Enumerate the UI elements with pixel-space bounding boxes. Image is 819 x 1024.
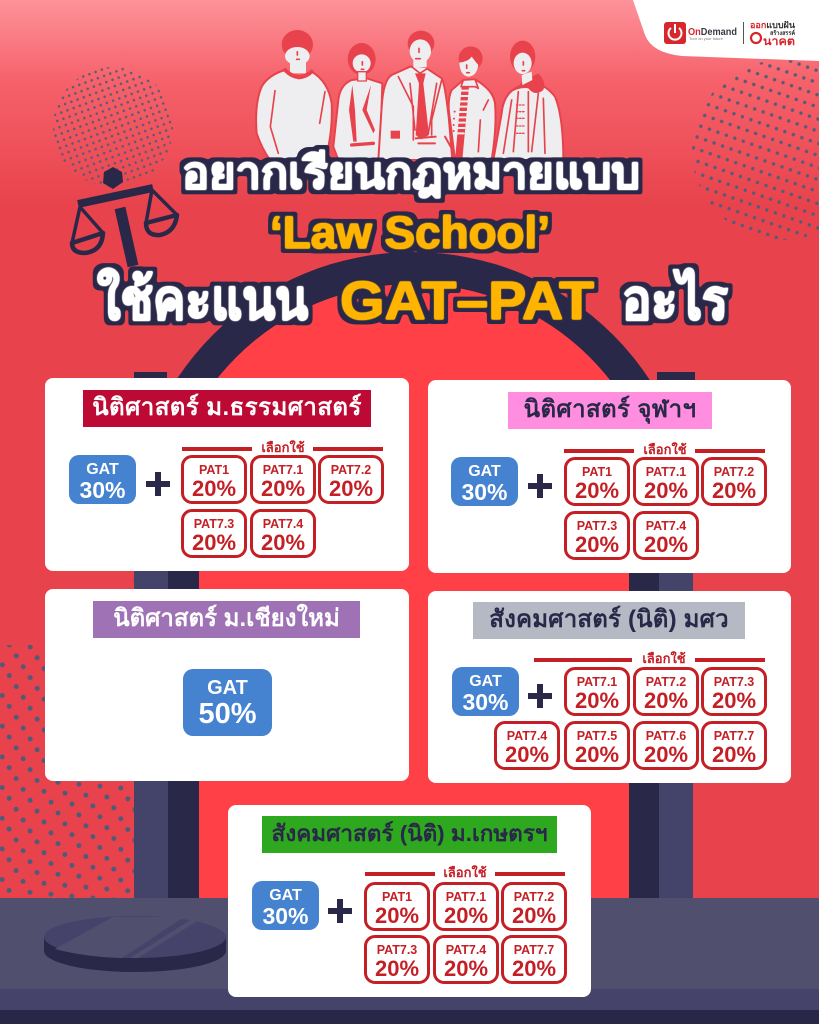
PAT7.1: 20% (444, 903, 488, 928)
GAT score (69, 455, 136, 504)
icon: power button logo (664, 22, 686, 44)
PAT7.3: PAT7.3 (377, 943, 417, 957)
PAT7.3 (564, 511, 630, 560)
heading: นิติศาสตร์ จุฬาฯ (524, 396, 696, 423)
GAT score: 50% (198, 698, 257, 730)
choose header (564, 442, 765, 457)
PAT7.7: PAT7.7 (714, 729, 754, 743)
heading: นิติศาสตร์ ม.ธรรมศาสตร์ (92, 394, 362, 421)
PAT7.1: 20% (575, 688, 619, 713)
choose header (182, 440, 383, 455)
slogan: สร้างสรรค์ (770, 29, 795, 37)
PAT1: 20% (192, 476, 236, 501)
PAT7.4 (494, 721, 560, 770)
PAT7.3: PAT7.3 (714, 675, 754, 689)
GAT score: GAT (468, 463, 501, 480)
title: GAT–PAT (340, 271, 594, 331)
GAT score: 30% (461, 479, 508, 505)
PAT7.5: PAT7.5 (577, 729, 617, 743)
person 2 (333, 43, 382, 160)
PAT7.2 (701, 457, 767, 506)
PAT7.3 (701, 667, 767, 716)
plus sign (146, 472, 170, 496)
PAT7.2: 20% (644, 688, 688, 713)
heading (473, 602, 745, 639)
PAT1 (181, 455, 247, 504)
PAT7.1: 20% (261, 476, 305, 501)
person 4 (449, 46, 496, 160)
PAT7.2: 20% (712, 478, 756, 503)
PAT7.6: 20% (644, 742, 688, 767)
title: ใช้คะแนน (97, 267, 308, 331)
GAT score (452, 667, 519, 716)
choose header (534, 651, 765, 666)
panel: SWU social science law (428, 591, 791, 783)
PAT7.7: PAT7.7 (514, 943, 554, 957)
PAT7.4 (250, 509, 316, 558)
slogan: ออกแบบฝัน (750, 20, 796, 30)
PAT7.2 (501, 882, 567, 931)
slogan (750, 20, 796, 48)
PAT7.2: PAT7.2 (514, 890, 554, 904)
GAT score: GAT (269, 887, 302, 904)
PAT7.1: 20% (644, 478, 688, 503)
GAT score: GAT (469, 673, 502, 690)
panel: Thammasat law (45, 378, 409, 571)
PAT7.7: 20% (712, 742, 756, 767)
corner logo tab (633, 0, 819, 61)
panel: Kasetsart social science law (228, 805, 591, 997)
heading: สังคมศาสตร์ (นิติ) มศว (489, 606, 729, 633)
PAT7.3 (364, 935, 430, 984)
PAT7.1: PAT7.1 (577, 675, 617, 689)
PAT7.4: PAT7.4 (446, 943, 486, 957)
GAT score (451, 457, 518, 506)
PAT7.2: 20% (512, 903, 556, 928)
choose header: เลือกใช้ (643, 442, 687, 457)
choose header: เลือกใช้ (261, 440, 305, 455)
PAT7.1 (564, 667, 630, 716)
PAT7.1: PAT7.1 (263, 463, 303, 477)
PAT1: 20% (575, 478, 619, 503)
choose header (365, 865, 565, 880)
GAT score: GAT (207, 677, 248, 699)
PAT7.3: 20% (375, 956, 419, 981)
PAT7.7: 20% (512, 956, 556, 981)
PAT7.3: 20% (712, 688, 756, 713)
PAT1 (564, 457, 630, 506)
PAT1: PAT1 (582, 465, 612, 479)
title: อยากเรียนกฎหมายแบบ (182, 149, 640, 198)
heading (508, 392, 712, 429)
PAT7.7 (501, 935, 567, 984)
heading (93, 601, 360, 638)
PAT7.4 (433, 935, 499, 984)
PAT7.2: PAT7.2 (646, 675, 686, 689)
GAT score: 30% (462, 689, 509, 715)
PAT1: PAT1 (199, 463, 229, 477)
heading: สังคมศาสตร์ (นิติ) ม.เกษตรฯ (272, 821, 548, 846)
person 3 (378, 31, 452, 160)
GAT score (183, 669, 272, 736)
title (92, 145, 733, 331)
PAT7.4: PAT7.4 (263, 517, 303, 531)
PAT7.3 (181, 509, 247, 558)
panel: Chiang Mai law (45, 589, 409, 781)
PAT7.3: PAT7.3 (577, 519, 617, 533)
GAT score: GAT (86, 461, 119, 478)
PAT7.3: PAT7.3 (194, 517, 234, 531)
person 5 (493, 41, 563, 160)
heading (83, 390, 371, 427)
PAT7.4: 20% (644, 532, 688, 557)
PAT7.3: 20% (575, 532, 619, 557)
slogan: นาคต (763, 36, 795, 48)
PAT7.4: PAT7.4 (646, 519, 686, 533)
GAT score: 30% (79, 477, 126, 503)
PAT7.3: 20% (192, 530, 236, 555)
panel: Chula law (428, 380, 791, 573)
icon: scales of justice (70, 167, 180, 268)
PAT7.2: 20% (329, 476, 373, 501)
choose header: เลือกใช้ (642, 651, 686, 666)
PAT7.2 (318, 455, 384, 504)
plus sign (528, 684, 552, 708)
PAT7.4: 20% (505, 742, 549, 767)
PAT7.4: 20% (261, 530, 305, 555)
PAT7.4: PAT7.4 (507, 729, 547, 743)
PAT7.1 (250, 455, 316, 504)
plus sign (328, 899, 352, 923)
PAT7.6: PAT7.6 (646, 729, 686, 743)
PAT7.1: PAT7.1 (646, 465, 686, 479)
plus sign (528, 474, 552, 498)
PAT1: 20% (375, 903, 419, 928)
tagline: Turn on your future (689, 36, 724, 41)
GAT score: 30% (262, 903, 309, 929)
GAT score (252, 881, 319, 930)
PAT7.5 (564, 721, 630, 770)
PAT7.4 (633, 511, 699, 560)
PAT7.4: 20% (444, 956, 488, 981)
title: อะไร (622, 267, 728, 331)
PAT7.1 (633, 457, 699, 506)
PAT7.7 (701, 721, 767, 770)
choose header: เลือกใช้ (443, 865, 487, 880)
PAT7.2 (633, 667, 699, 716)
PAT1: PAT1 (382, 890, 412, 904)
heading: นิติศาสตร์ ม.เชียงใหม่ (113, 605, 340, 632)
PAT7.2: PAT7.2 (331, 463, 371, 477)
PAT7.5: 20% (575, 742, 619, 767)
PAT7.2: PAT7.2 (714, 465, 754, 479)
illustration: five students (255, 30, 564, 160)
person 1 (256, 30, 332, 160)
title: ‘Law School’ (270, 207, 550, 258)
heading (262, 816, 557, 853)
OnDemand wordmark: OnDemand (688, 27, 737, 38)
PAT7.1: PAT7.1 (446, 890, 486, 904)
PAT7.1 (433, 882, 499, 931)
PAT7.6 (633, 721, 699, 770)
PAT1 (364, 882, 430, 931)
